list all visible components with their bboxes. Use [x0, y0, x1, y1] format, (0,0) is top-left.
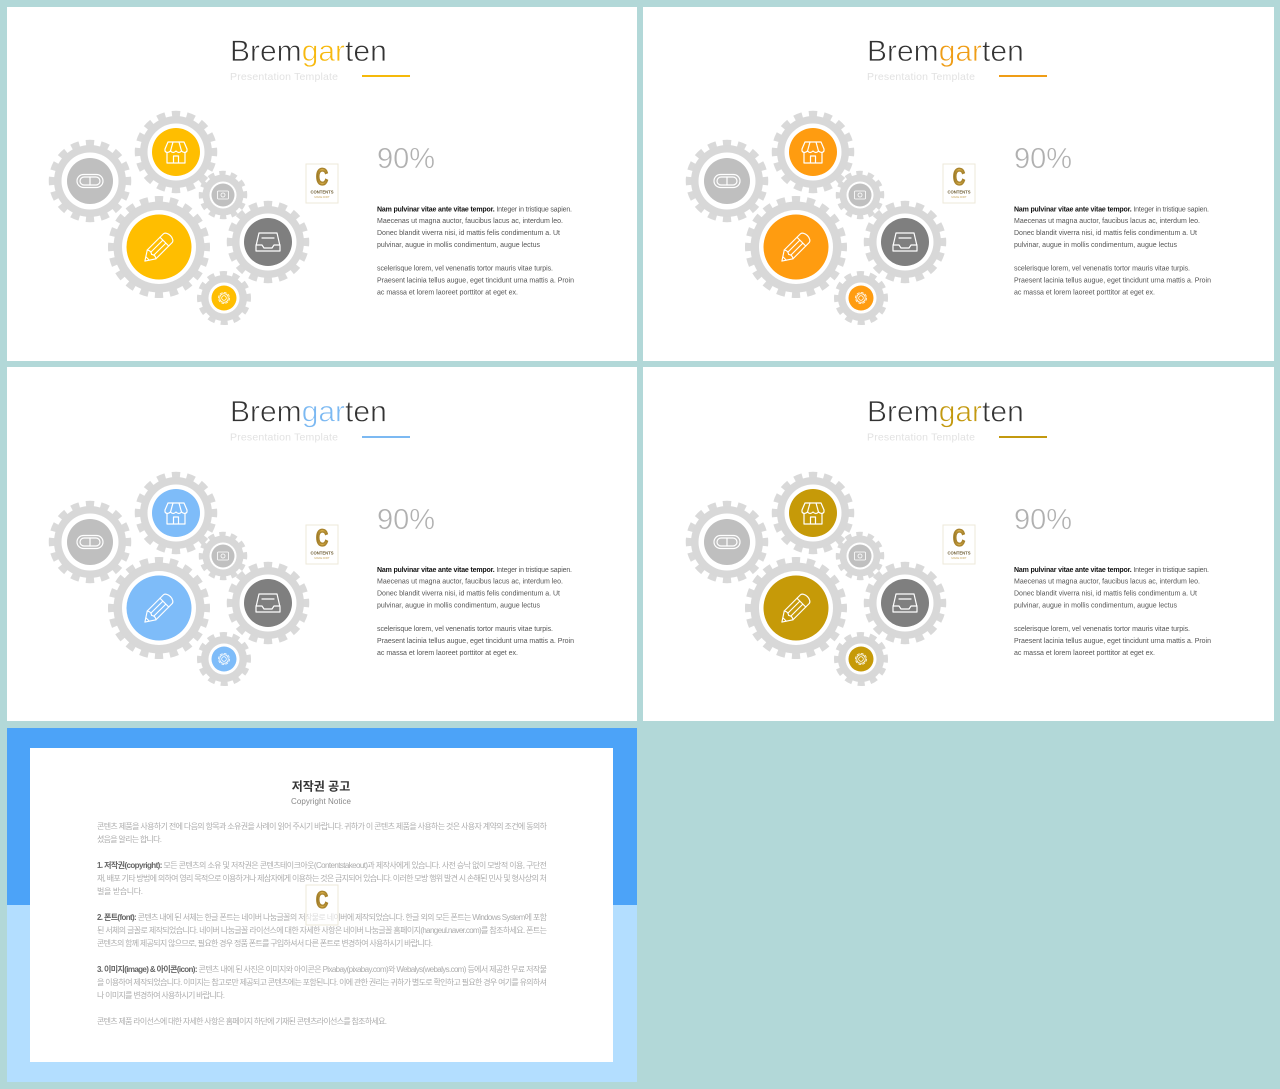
section 1 copyright: 벌을 받습니다.: [97, 886, 143, 896]
section 3 image and icon: [97, 964, 547, 1000]
logo: CONTENTS: [310, 550, 334, 556]
panel: slide 2 orange: [643, 7, 1274, 361]
logo: CONTENTS: [310, 190, 334, 194]
logo: [306, 525, 338, 564]
body text: [377, 206, 574, 296]
gear: pill: [689, 143, 765, 219]
panel background: [643, 367, 1274, 721]
gear: cog: [200, 274, 248, 322]
panel background: [7, 367, 637, 721]
intro paragraph: 셨음을 알리는 합니다.: [97, 834, 162, 844]
section 1 copyright: 재, 배포 기타 방법에 의하여 영리 목적으로 이용하거나 제삼자에게 이용하는 것은 금지되어 있습니다. 이러한 모방 행위 발견 시 손해된 민사 및 형사상의 처: [97, 873, 547, 883]
subtitle: Presentation Template: [230, 432, 338, 444]
gear: camera: [838, 173, 882, 217]
logo: C: [316, 525, 328, 552]
body text: [1014, 567, 1211, 657]
section 1 copyright: 1. 저작권(copyright): 모든 콘텐츠의 소유 및 저작권은 콘텐츠테이크아웃(Contentstakeout)과 제작사에게 있습니다. 사전 승낙 없이 모방적 이용, 구단전: [97, 860, 547, 870]
body text: Nam pulvinar vitae ante vitae tempor. Integer in tristique sapien.: [377, 567, 572, 574]
body text: Maecenas ut magna auctor, faucibus lacus ac, interdum leo.: [1014, 578, 1200, 586]
gear: pencil: [748, 200, 844, 294]
body text: Praesent lacinia tellus augue, eget tincidunt urna mattis a. Proin: [1014, 638, 1211, 645]
blue backdrop top: [7, 728, 637, 905]
section 2 font: 콘텐츠의 함께 제공되지 않으므로, 필요한 경우 정품 폰트를 구입하셔서 다른 폰트로 변경하여 사용하시기 바랍니다.: [97, 938, 433, 948]
gear: pencil: [112, 200, 206, 294]
logo: C: [316, 164, 328, 191]
panel: slide 4 dark gold: [643, 367, 1274, 721]
subtitle: Presentation Template: [867, 71, 975, 83]
logo: C: [953, 164, 965, 191]
panel: slide 1 yellow: [7, 7, 637, 361]
body text: ac massa et lorem laoreet porttitor at eget ex.: [377, 650, 518, 657]
body text: pulvinar, augue in mollis condimentum, augue lectus: [377, 602, 540, 610]
gear: shop: [138, 475, 214, 551]
body text: [377, 567, 574, 657]
gear: pencil: [748, 560, 844, 656]
panel background: [7, 7, 637, 361]
title: Bremgarten: [230, 396, 387, 428]
gear: tray: [230, 204, 306, 280]
section 3 image and icon: 나 이미지를 변경하여 사용하시기 바랍니다.: [97, 990, 225, 1000]
gear: camera: [838, 534, 882, 578]
body text: pulvinar, augue in mollis condimentum, augue lectus: [1014, 242, 1178, 249]
notice title: 저작권 공고: [292, 778, 350, 794]
gear: pill: [689, 504, 765, 580]
body text: ac massa et lorem laoreet porttitor at eget ex.: [377, 290, 518, 296]
gear: pill: [52, 504, 128, 580]
body text: ac massa et lorem laoreet porttitor at eget ex.: [1014, 650, 1155, 657]
section 3 image and icon: 3. 이미지(image) & 아이콘(icon): 콘텐츠 내에 된 사진은 이미지와 아이콘은 Pixabay(pixabay.com)와 Webalys(webalys.com) 등에서 제공한 무료 저작물: [97, 964, 547, 974]
notice subtitle: Copyright Notice: [291, 797, 352, 806]
intro paragraph: 콘텐츠 제품을 사용하기 전에 다음의 항목과 소유권을 사례이 읽어 주시기 바랍니다. 귀하가 이 콘텐츠 제품을 사용하는 것은 사용자 계약의 조건에 동의하: [97, 821, 548, 831]
body text: Nam pulvinar vitae ante vitae tempor. Integer in tristique sapien.: [1014, 206, 1209, 214]
gear: camera: [201, 534, 245, 578]
title: Bremgarten: [867, 35, 1024, 68]
subtitle: Presentation Template: [230, 71, 338, 83]
body text: Donec blandit viverra nisi, id mattis felis condimentum a. Ut: [377, 590, 560, 598]
section 1 copyright: [97, 860, 547, 896]
gear: shop: [775, 475, 851, 551]
logo: C: [953, 525, 965, 552]
accent line: [999, 436, 1047, 438]
section 2 font: [97, 912, 548, 948]
body text: Maecenas ut magna auctor, faucibus lacus ac, interdum leo.: [377, 218, 563, 225]
section 2 font: 2. 폰트(font): 콘텐츠 내에 된 서체는 한글 폰트는 네이버 나눔글꼴의 저작물로 네이버에 제작되었습니다. 한글 외의 모든 폰트는 Windows System에 포함: [97, 912, 548, 922]
gear: camera: [201, 173, 245, 217]
gear: tray: [867, 204, 943, 280]
body text: scelerisque lorem, vel venenatis tortor mauris vitae turpis.: [377, 626, 553, 633]
body text: Praesent lacinia tellus augue, eget tincidunt urna mattis a. Proin: [377, 638, 574, 645]
gear: pencil: [112, 560, 206, 656]
accent line: [362, 436, 410, 438]
accent line: [999, 75, 1047, 77]
logo: [943, 525, 975, 564]
logo: MAKE DIRT: [314, 556, 330, 560]
panel background: [643, 7, 1274, 361]
logo: CONTENTS: [947, 550, 971, 556]
intro paragraph: [97, 821, 548, 844]
gear: tray: [867, 565, 943, 641]
logo: [306, 164, 338, 203]
body text: Nam pulvinar vitae ante vitae tempor. Integer in tristique sapien.: [377, 206, 572, 214]
body text: Donec blandit viverra nisi, id mattis felis condimentum a. Ut: [1014, 590, 1197, 598]
logo: [943, 164, 975, 203]
gear: cog: [836, 634, 886, 684]
body text: scelerisque lorem, vel venenatis tortor mauris vitae turpis.: [377, 266, 553, 272]
gear: cog: [836, 274, 886, 322]
logo: MAKE DIRT: [951, 195, 967, 199]
white card: [30, 748, 613, 1062]
body text: pulvinar, augue in mollis condimentum, augue lectus: [1014, 602, 1178, 610]
logo: [306, 885, 338, 925]
logo: MAKE DIRT: [951, 556, 967, 560]
percentage: 90%: [1014, 143, 1072, 175]
gear: pill: [52, 143, 128, 219]
body text: pulvinar, augue in mollis condimentum, augue lectus: [377, 242, 540, 249]
blue backdrop bottom: [7, 905, 637, 1082]
section 2 font: 된 서체의 글꼴로 제작되었습니다. 네이버 나눔글꼴 라이선스에 대한 자세한 사항은 네이버 나눔글꼴 홈페이지(hangeul.naver.com)를 참조하세요. 폰트는: [97, 925, 547, 935]
title: Bremgarten: [867, 396, 1024, 428]
body text: Maecenas ut magna auctor, faucibus lacus ac, interdum leo.: [377, 578, 563, 586]
gear: cog: [200, 634, 248, 684]
body text: Donec blandit viverra nisi, id mattis felis condimentum a. Ut: [1014, 230, 1197, 237]
logo: MAKE DIRT: [314, 195, 330, 199]
gear: shop: [138, 114, 214, 190]
body text: [1014, 206, 1211, 296]
title: Bremgarten: [230, 35, 387, 68]
body text: Nam pulvinar vitae ante vitae tempor. Integer in tristique sapien.: [1014, 567, 1209, 574]
body text: scelerisque lorem, vel venenatis tortor mauris vitae turpis.: [1014, 626, 1190, 633]
subtitle: Presentation Template: [867, 432, 975, 444]
gear: shop: [775, 114, 851, 190]
body text: Maecenas ut magna auctor, faucibus lacus ac, interdum leo.: [1014, 218, 1200, 225]
accent line: [362, 75, 410, 77]
percentage: 90%: [1014, 504, 1072, 536]
logo: CONTENTS: [947, 190, 971, 194]
section 3 image and icon: 을 이용하여 제작되었습니다. 이미지는 참고로만 제공되고 콘텐츠에는 포함된니다. 이에 관한 권리는 귀하가 별도로 확인하고 필요한 경우 여기를 유의하셔: [97, 977, 547, 987]
panel: copyright notice: [7, 728, 637, 1082]
percentage: 90%: [377, 143, 435, 175]
body text: scelerisque lorem, vel venenatis tortor mauris vitae turpis.: [1014, 266, 1190, 272]
body text: Donec blandit viverra nisi, id mattis felis condimentum a. Ut: [377, 230, 560, 237]
panel: slide 3 blue: [7, 367, 637, 721]
logo: C: [316, 887, 328, 914]
body text: Praesent lacinia tellus augue, eget tincidunt urna mattis a. Proin: [1014, 278, 1211, 284]
percentage: 90%: [377, 504, 435, 536]
gear: tray: [230, 565, 306, 641]
closing line: 콘텐츠 제품 라이선스에 대한 자세한 사항은 홈페이지 하단에 기재된 콘텐츠라이선스를 참조하세요.: [97, 1016, 387, 1026]
body text: Praesent lacinia tellus augue, eget tincidunt urna mattis a. Proin: [377, 278, 574, 284]
body text: ac massa et lorem laoreet porttitor at eget ex.: [1014, 290, 1155, 296]
